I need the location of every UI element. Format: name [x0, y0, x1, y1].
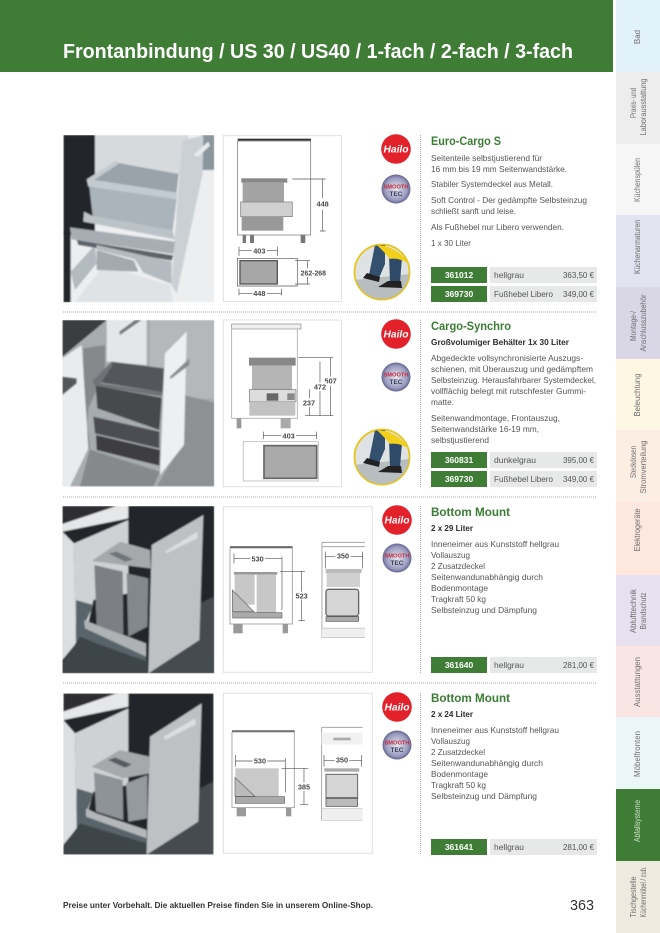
text: Cargo-Synchro: matte. — [431, 397, 454, 407]
price rows: Cargo-Synchro: 369730 — [445, 474, 473, 484]
price row: 361640: 281,00 € — [563, 660, 594, 670]
text: Bottom Mount 2 x 29 Liter: Bodenmontage — [431, 583, 488, 593]
text: Bottom Mount 2 x 29 Liter: Selbsteinzug und Dämpfung — [431, 605, 537, 615]
text: Cargo-Synchro: selbstjustierend — [431, 435, 489, 445]
text: Bottom Mount 2 x 24 Liter: Inneneimer aus Kunststoff hellgrau — [431, 725, 559, 735]
icons: Cargo-Synchro — [354, 319, 411, 485]
side navigation tabs: Ausstattungen — [633, 657, 642, 707]
text: Euro-Cargo S: Euro-Cargo S — [431, 134, 501, 148]
footer note: Preise unter Vorbehalt. Die aktuellen Preise finden Sie in unserem Online-Shop. — [63, 900, 373, 910]
text: Bottom Mount 2 x 24 Liter: 2 Zusatzdeckel — [431, 747, 485, 757]
icons: Euro-Cargo S — [354, 134, 411, 300]
text: Cargo-Synchro: Cargo-Synchro — [431, 319, 511, 333]
text: Bottom Mount 2 x 24 Liter: Bodenmontage — [431, 769, 488, 779]
text: Bottom Mount 2 x 29 Liter — [431, 505, 559, 615]
price row: 361641: 281,00 € — [563, 842, 594, 852]
side navigation tabs: Möbelfronten — [633, 731, 642, 777]
icons: Bottom Mount 2 x 29 Liter — [382, 505, 412, 572]
text: Cargo-Synchro: schienen, mit Überauszug und gedämpftem — [431, 364, 593, 374]
diagram: Bottom Mount 2 x 29 Liter: 523 — [296, 591, 308, 600]
side navigation tabs: Montage-/ — [629, 310, 638, 341]
text: Bottom Mount 2 x 29 Liter: 2 Zusatzdeckel — [431, 561, 485, 571]
side navigation tabs: Abfallsysteme — [633, 800, 642, 842]
side navigation tabs: Bad — [633, 30, 642, 44]
text: Bottom Mount 2 x 24 Liter: Bottom Mount — [431, 691, 510, 705]
price rows: Euro-Cargo S: Fußhebel Libero — [494, 289, 553, 299]
diagram: Bottom Mount 2 x 24 Liter: 385 — [298, 782, 310, 791]
side navigation tabs: Ablufttechnik — [629, 588, 638, 633]
text: Cargo-Synchro: Großvolumiger Behälter 1x 30 Liter — [431, 337, 570, 347]
side navigation tabs: Küchenarmaturen — [633, 220, 642, 274]
text: Bottom Mount 2 x 29 Liter: Seitenwandunabhängig durch — [431, 572, 543, 582]
diagram: Bottom Mount 2 x 24 Liter: 350 — [336, 756, 348, 765]
text: Bottom Mount 2 x 29 Liter: Tragkraft 50 kg — [431, 594, 486, 604]
price rows: Euro-Cargo S: 363,50 € — [563, 270, 594, 280]
text: Cargo-Synchro: vollflächig belegt mit rutschfester Gummi- — [431, 386, 586, 396]
text: Bottom Mount 2 x 24 Liter: 2 x 24 Liter — [431, 709, 474, 719]
text: Euro-Cargo S: Als Fußhebel nur Libero verwenden. — [431, 222, 564, 232]
diagram: Euro-Cargo S: 448 — [317, 200, 329, 209]
price rows: Euro-Cargo S: 361012 — [445, 270, 473, 280]
text: Bottom Mount 2 x 24 Liter: Selbsteinzug und Dämpfung — [431, 791, 537, 801]
text: Bottom Mount 2 x 24 Liter — [431, 691, 559, 801]
photo: Euro-Cargo S — [63, 135, 214, 302]
text: Euro-Cargo S: 1 x 30 Liter — [431, 238, 471, 248]
dotted separators — [63, 135, 597, 854]
price row: 361640: hellgrau — [494, 660, 524, 670]
photo: Bottom Mount 2 x 29 Liter — [62, 506, 214, 673]
text: Euro-Cargo S: Seitenteile selbstjustierend für — [431, 153, 542, 163]
text: Cargo-Synchro: Selbsteinzug. Herausfahrbarer Systemdeckel, — [431, 375, 596, 385]
header band — [0, 0, 613, 72]
diagram: Bottom Mount 2 x 29 Liter: 350 — [337, 552, 349, 561]
side navigation tabs: Stromverteilung — [639, 440, 648, 494]
text: Bottom Mount 2 x 29 Liter: 2 x 29 Liter — [431, 523, 474, 533]
diagram: Bottom Mount 2 x 29 Liter: 530 — [252, 554, 264, 563]
price rows: Euro-Cargo S — [431, 267, 597, 302]
price rows: Euro-Cargo S: 369730 — [445, 289, 473, 299]
side navigation tabs: Laborausstattung — [639, 78, 648, 136]
text: Euro-Cargo S: Stabiler Systemdeckel aus Metall. — [431, 179, 553, 189]
price row: 361641: 361641 — [445, 842, 473, 852]
diagram: Euro-Cargo S: 448 — [253, 289, 265, 298]
price rows: Cargo-Synchro: 360831 — [445, 455, 473, 465]
price row: 361641 — [431, 839, 597, 855]
side navigation tabs: Steckdosen — [629, 446, 638, 478]
diagram: Euro-Cargo S: 262-268 — [301, 268, 326, 277]
side navigation tabs: Küchenmöbel / cub. — [639, 866, 648, 918]
text: Cargo-Synchro: Seitenwandmontage, Frontauszug, — [431, 413, 560, 423]
icons: Bottom Mount 2 x 24 Liter — [382, 692, 412, 760]
diagram: Bottom Mount 2 x 24 Liter — [223, 693, 372, 853]
page number: 363 — [570, 897, 594, 914]
text: Bottom Mount 2 x 29 Liter: Vollauszug — [431, 550, 470, 560]
price rows: Cargo-Synchro — [431, 452, 597, 487]
price row: 361640: 361640 — [445, 660, 473, 670]
diagram: Euro-Cargo S: 403 — [253, 246, 265, 255]
text: Cargo-Synchro — [431, 319, 596, 445]
side navigation tabs: Anschlusszubehör — [639, 294, 648, 352]
text: Bottom Mount 2 x 24 Liter: Vollauszug — [431, 736, 470, 746]
price rows: Cargo-Synchro: 395,00 € — [563, 455, 594, 465]
side navigation tabs: Praxis- und — [629, 88, 638, 118]
title: Frontanbindung / US 30 / US40 / 1-fach / 2-fach / 3-fach — [63, 41, 573, 63]
price row: 361640 — [431, 657, 597, 673]
text: Cargo-Synchro: Seitenwandstärke 16-19 mm, — [431, 424, 539, 434]
side navigation tabs — [616, 0, 660, 933]
photo: Cargo-Synchro — [62, 320, 214, 487]
side navigation tabs: Elektrogeräte — [633, 508, 642, 552]
text: Euro-Cargo S: schließt sanft und leise. — [431, 206, 516, 216]
diagram: Cargo-Synchro: 237 — [303, 398, 315, 407]
side navigation tabs: Küchenspülen — [633, 158, 642, 202]
diagram: Cargo-Synchro: 472 — [314, 382, 326, 391]
diagram: Cargo-Synchro — [223, 320, 342, 487]
diagram: Euro-Cargo S — [223, 136, 342, 302]
price row: 361641: hellgrau — [494, 842, 524, 852]
text: Bottom Mount 2 x 29 Liter: Bottom Mount — [431, 505, 510, 519]
side navigation tabs: Beleuchtung — [633, 374, 642, 416]
side navigation tabs: Brandschutz — [639, 592, 648, 630]
photo: Bottom Mount 2 x 24 Liter — [63, 693, 214, 855]
price rows: Cargo-Synchro: Fußhebel Libero — [494, 474, 553, 484]
price rows: Euro-Cargo S: hellgrau — [494, 270, 524, 280]
text: Cargo-Synchro: Abgedeckte vollsynchronisierte Auszugs- — [431, 353, 583, 363]
diagram: Cargo-Synchro: 403 — [283, 431, 295, 440]
price rows: Euro-Cargo S: 349,00 € — [563, 289, 594, 299]
price rows: Cargo-Synchro: dunkelgrau — [494, 455, 536, 465]
diagram: Bottom Mount 2 x 24 Liter: 530 — [254, 756, 266, 765]
side navigation tabs: Tischgestelle — [629, 876, 638, 918]
text: Bottom Mount 2 x 24 Liter: Tragkraft 50 kg — [431, 780, 486, 790]
diagram: Cargo-Synchro: 507 — [325, 377, 337, 386]
diagram: Bottom Mount 2 x 29 Liter — [223, 507, 372, 672]
text: Bottom Mount 2 x 24 Liter: Seitenwandunabhängig durch — [431, 758, 543, 768]
text: Bottom Mount 2 x 29 Liter: Inneneimer aus Kunststoff hellgrau — [431, 539, 559, 549]
price rows: Cargo-Synchro: 349,00 € — [563, 474, 594, 484]
text: Euro-Cargo S: Soft Control - Der gedämpfte Selbsteinzug — [431, 195, 587, 205]
text: Euro-Cargo S: 16 mm bis 19 mm Seitenwandstärke. — [431, 164, 567, 174]
text: Euro-Cargo S — [431, 134, 587, 248]
